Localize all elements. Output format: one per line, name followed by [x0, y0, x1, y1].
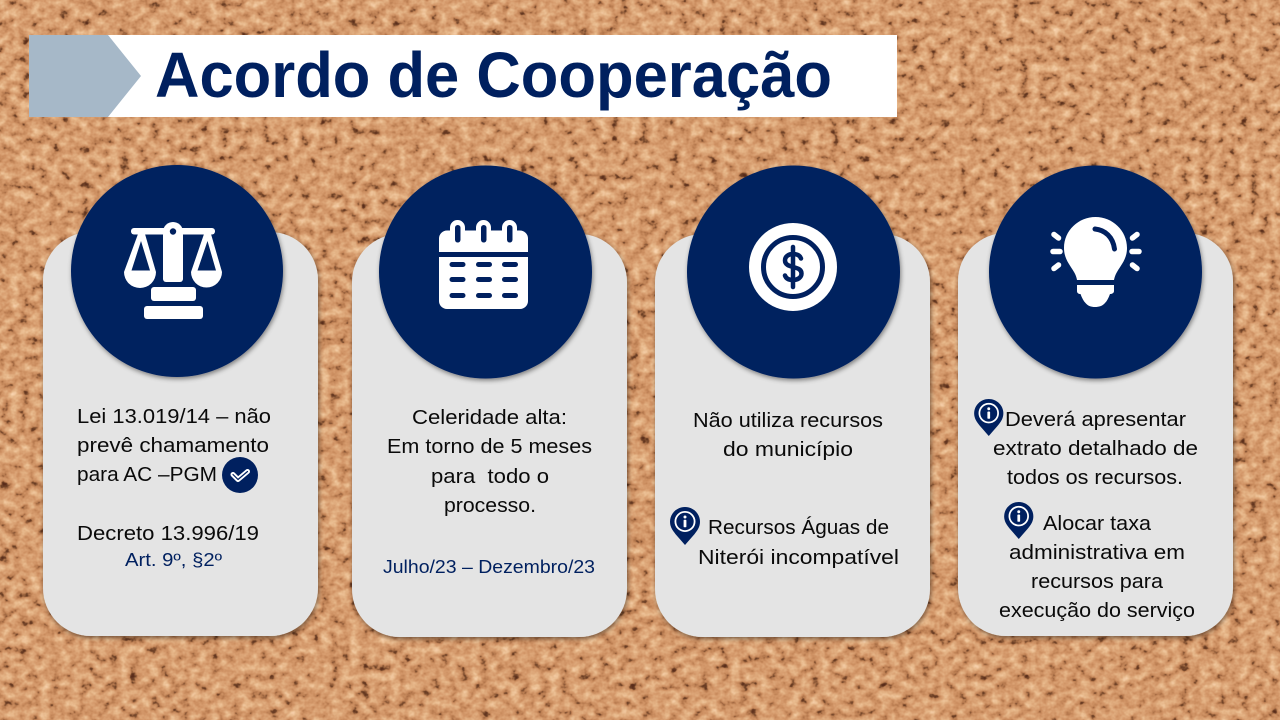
text: detailed statement: extrato detalhado de	[993, 437, 1198, 460]
text: municipal resources	[693, 409, 883, 461]
text: legal references: para AC –PGM	[77, 463, 217, 486]
card background	[43, 232, 318, 636]
text: timeline: Celeridade alta:	[412, 406, 567, 429]
icon: calendar	[439, 220, 528, 309]
text: administrative fee: execução do serviço	[999, 599, 1195, 622]
arrow accent	[29, 35, 141, 117]
text: Águas de Niterói	[698, 516, 899, 569]
panel: speed	[352, 166, 627, 637]
icon: dollar coin	[749, 223, 837, 311]
panel: legal basis	[43, 165, 318, 636]
text: legal references: Decreto 13.996/19	[77, 522, 259, 545]
text: legal references: prevê chamamento	[77, 434, 269, 457]
text: administrative fee	[999, 512, 1195, 622]
icon: info pin	[1004, 502, 1033, 539]
circle badge	[71, 165, 283, 377]
panel: resources	[655, 166, 930, 637]
circle badge	[379, 166, 592, 378]
icon: scales of justice	[124, 222, 222, 319]
text: legal references: Art. 9º, §2º	[125, 550, 222, 570]
title: Acordo de Cooperação	[155, 39, 832, 111]
text: timeline: Julho/23 – Dezembro/23	[383, 556, 595, 577]
text: administrative fee: Alocar taxa	[1043, 512, 1152, 535]
text: Águas de Niterói: Recursos Águas de	[708, 516, 889, 539]
text: timeline	[383, 406, 595, 577]
text: municipal resources: do município	[723, 438, 853, 461]
card background	[655, 234, 930, 637]
icon: check badge	[222, 457, 258, 493]
icon: light bulb	[1053, 217, 1139, 307]
text: administrative fee: administrativa em	[1009, 541, 1185, 564]
text: detailed statement: Deverá apresentar	[1005, 408, 1186, 431]
text: timeline: para todo o	[431, 465, 549, 488]
title banner	[29, 35, 897, 117]
text: administrative fee: recursos para	[1031, 570, 1164, 593]
text: legal references: Lei 13.019/14 – não	[77, 405, 271, 428]
text: detailed statement: todos os recursos.	[1007, 466, 1183, 489]
card background	[958, 233, 1233, 636]
text: timeline: processo.	[444, 494, 536, 517]
panel: requirements	[958, 166, 1233, 636]
circle badge	[989, 166, 1202, 378]
text: detailed statement	[993, 408, 1198, 489]
text: timeline: Em torno de 5 meses	[387, 435, 592, 458]
card background	[352, 234, 627, 637]
circle badge	[687, 166, 900, 378]
text: municipal resources: Não utiliza recursos	[693, 409, 883, 432]
icon: info pin	[974, 399, 1003, 436]
icon: info pin	[670, 507, 700, 545]
text: legal references	[77, 405, 271, 570]
text: Águas de Niterói: Niterói incompatível	[698, 546, 899, 569]
